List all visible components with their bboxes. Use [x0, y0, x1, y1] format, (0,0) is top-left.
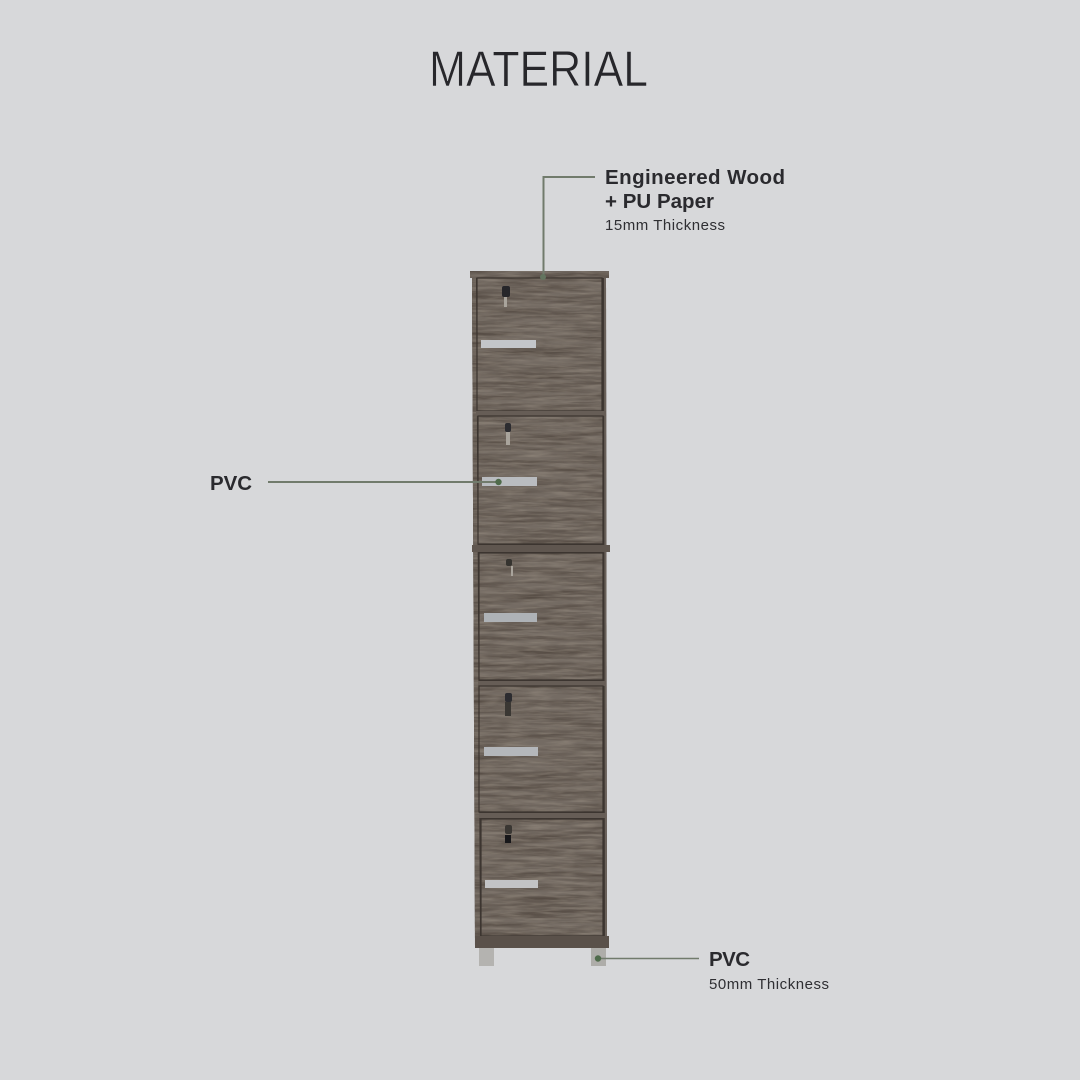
product: five-door wooden locker cabinet	[470, 271, 610, 966]
callout: engineered wood	[540, 166, 785, 280]
door 4	[479, 686, 603, 812]
leader line to leg	[595, 955, 699, 962]
cabinet legs	[479, 948, 606, 966]
engineered wood label: Engineered Wood	[605, 166, 785, 189]
base board	[475, 936, 609, 948]
cabinet carcass	[472, 277, 607, 948]
door 5	[481, 819, 603, 936]
shelf 1	[476, 411, 606, 416]
title: MATERIAL	[429, 41, 648, 97]
callout: PVC handle	[210, 472, 502, 495]
PVC legs label: PVC	[709, 948, 750, 971]
door 2	[478, 416, 603, 544]
PVC handle label: PVC	[210, 472, 252, 495]
engineered wood label: + PU Paper	[605, 190, 714, 213]
shelf 3	[478, 681, 605, 686]
leader line to top board	[540, 177, 595, 280]
callout: PVC legs	[595, 948, 829, 993]
leader line to handle	[268, 479, 502, 485]
engineered wood label: 15mm Thickness	[605, 217, 725, 234]
PVC legs label	[709, 948, 829, 993]
engineered wood label	[605, 166, 785, 234]
door 1	[477, 278, 602, 411]
shelf 4	[479, 813, 605, 818]
top board	[470, 271, 609, 278]
middle shelf	[472, 545, 610, 552]
door 3	[479, 553, 603, 680]
PVC legs label: 50mm Thickness	[709, 976, 829, 993]
